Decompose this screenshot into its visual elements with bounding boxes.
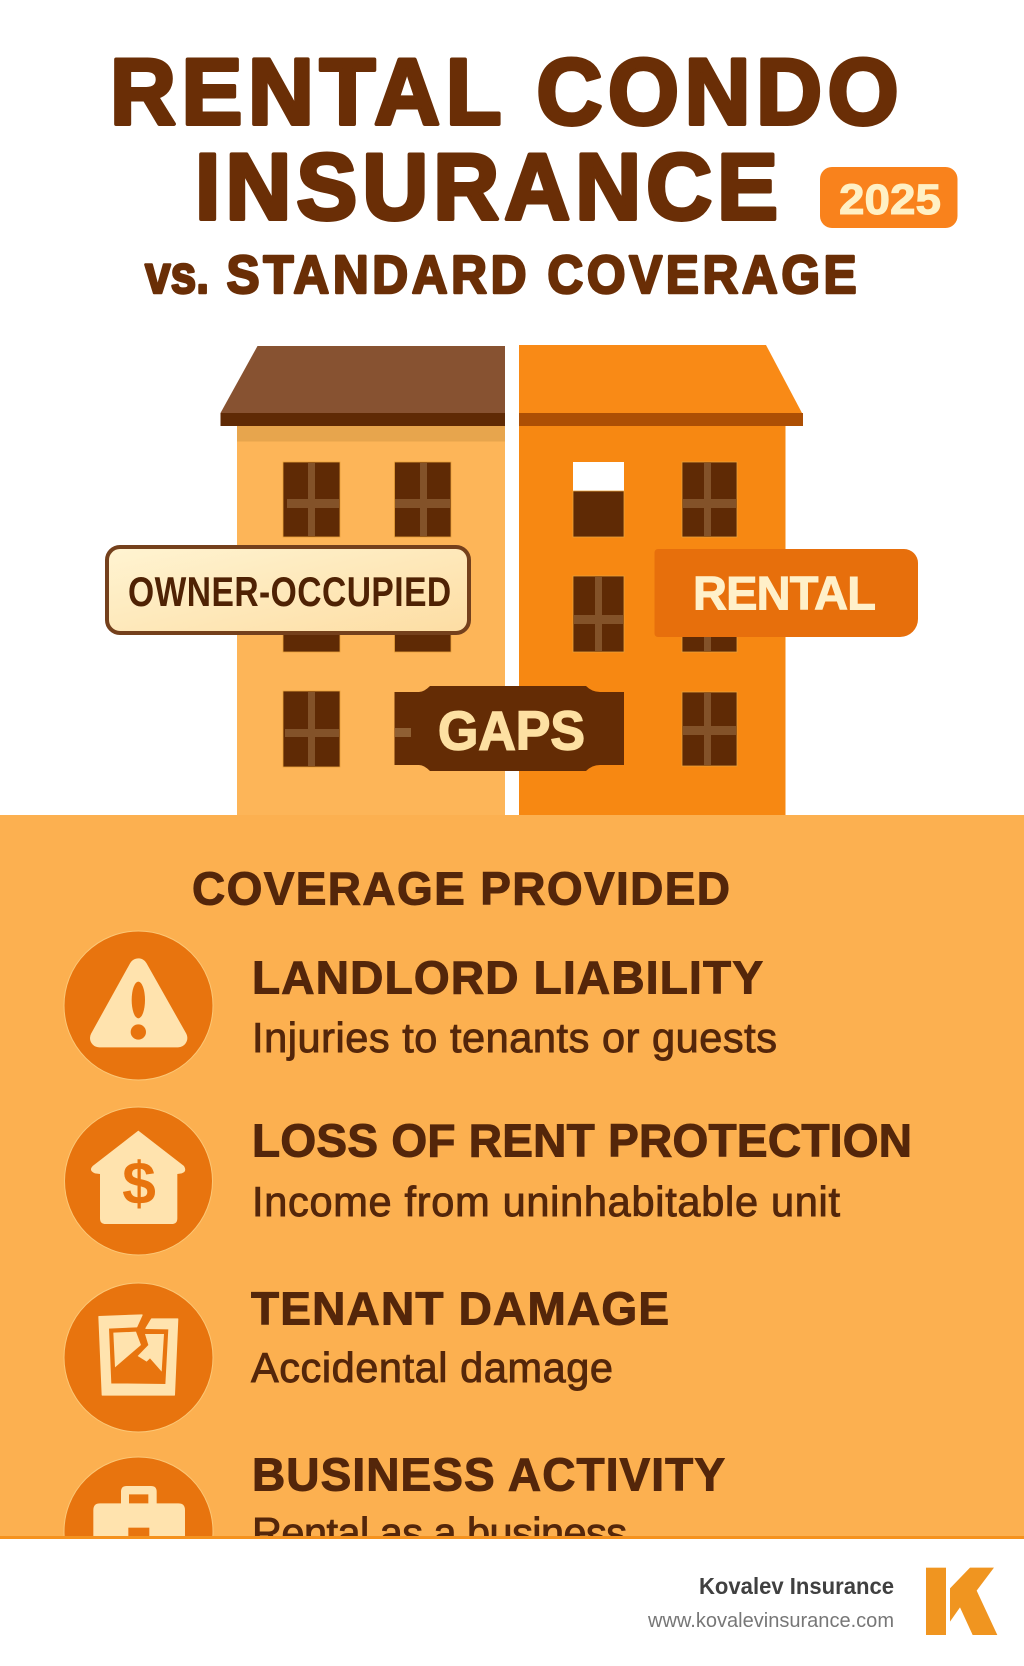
year badge: 2025 xyxy=(839,176,941,224)
item: business activity: BUSINESS ACTIVITY xyxy=(252,1448,725,1500)
panel: coverage provided xyxy=(0,815,1024,1606)
roof xyxy=(519,345,802,413)
building: owner-occupied half xyxy=(220,346,505,816)
subtitle: vs.: vs. xyxy=(145,245,209,305)
label: gaps xyxy=(394,686,624,771)
label: rental: RENTAL xyxy=(693,566,876,620)
item: tenant damage xyxy=(251,1282,669,1391)
icon: briefcase xyxy=(64,1456,214,1536)
item: business activity xyxy=(254,1458,726,1536)
icon: house with dollar: $ xyxy=(122,1149,156,1217)
building: rental half xyxy=(519,345,803,816)
item: landlord liability xyxy=(252,952,777,1061)
company name: Kovalev Insurance xyxy=(699,1573,894,1599)
item: business activity: Rental as a business xyxy=(252,1509,627,1556)
windows xyxy=(573,462,737,766)
item: landlord liability: Injuries to tenants or guests xyxy=(252,1014,777,1061)
item: tenant damage: Accidental damage xyxy=(251,1344,613,1391)
footer brand xyxy=(647,1568,997,1635)
roof xyxy=(220,346,505,413)
icon: broken frame xyxy=(64,1283,213,1432)
title line: rental condo: RENTAL CONDO xyxy=(110,39,899,144)
item: loss of rent protection: LOSS OF RENT PROTECTION xyxy=(252,1114,912,1166)
logo: K xyxy=(926,1568,997,1635)
heading: coverage provided: COVERAGE PROVIDED xyxy=(192,862,730,914)
year badge xyxy=(820,167,958,228)
wall xyxy=(237,425,505,816)
icon: warning triangle xyxy=(64,931,213,1080)
title line: insurance: INSURANCE xyxy=(195,134,778,239)
label: rental xyxy=(654,549,918,637)
item: tenant damage: TENANT DAMAGE xyxy=(251,1282,669,1334)
label: owner-occupied xyxy=(107,547,469,633)
item: landlord liability: LANDLORD LIABILITY xyxy=(252,952,763,1004)
item: loss of rent protection: Income from uninhabitable unit xyxy=(252,1178,840,1225)
item: loss of rent protection xyxy=(254,1124,910,1217)
title xyxy=(110,39,899,305)
wall xyxy=(519,425,786,816)
label: gaps: GAPS xyxy=(438,700,585,762)
subtitle: standard coverage: STANDARD COVERAGE xyxy=(226,244,857,304)
windows xyxy=(283,462,451,767)
label: owner-occupied: OWNER-OCCUPIED xyxy=(128,570,451,616)
icon: house with dollar xyxy=(64,1107,212,1255)
website: www.kovalevinsurance.com xyxy=(647,1610,894,1632)
